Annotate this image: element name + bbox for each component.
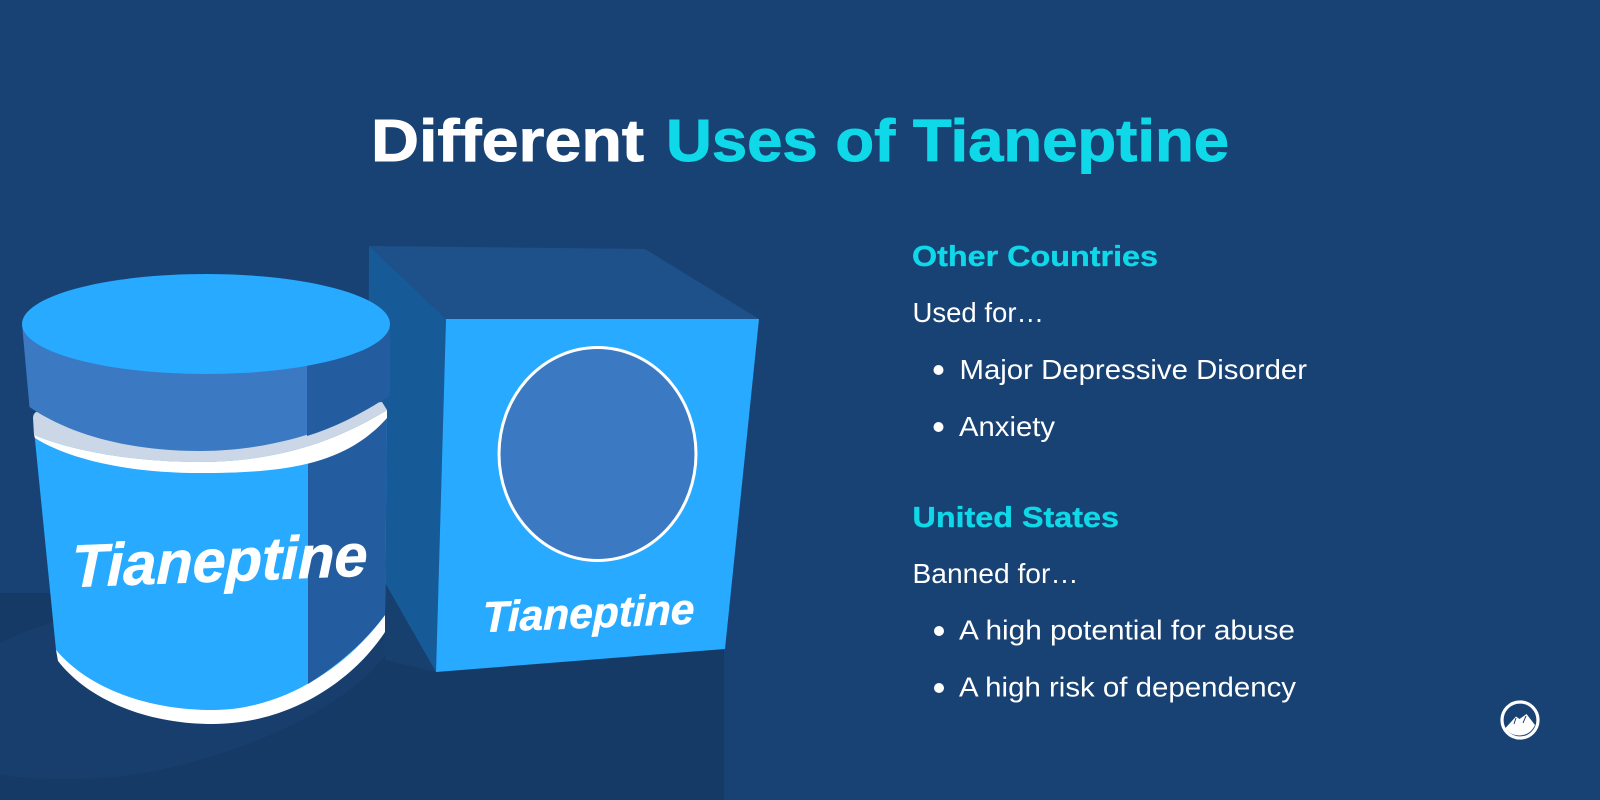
icon: mountain logo bbox=[1502, 702, 1538, 738]
heading: Other Countries bbox=[912, 241, 1158, 273]
intro: Used for… bbox=[912, 297, 1044, 328]
box ground shadow bbox=[385, 583, 436, 672]
box top face bbox=[369, 246, 759, 319]
box front face bbox=[436, 319, 759, 672]
box label text: Tianeptine bbox=[482, 585, 695, 642]
lid side shaded bbox=[307, 324, 390, 436]
box left face bbox=[368, 246, 446, 672]
box bbox=[368, 246, 759, 672]
bullet list bbox=[934, 614, 1296, 702]
bullet list: A high risk of dependency bbox=[959, 672, 1296, 702]
jar neck ring grey bbox=[33, 402, 387, 462]
text block: united states bbox=[912, 502, 1296, 702]
jar neck ring white bbox=[34, 410, 387, 473]
intro: Banned for… bbox=[912, 558, 1078, 589]
box label circle bbox=[499, 348, 696, 560]
text block: other countries bbox=[912, 241, 1307, 442]
bullet list bbox=[934, 354, 1307, 442]
bullet list: A high potential for abuse bbox=[959, 614, 1295, 646]
title: Uses of Tianeptine bbox=[666, 108, 1229, 174]
title bbox=[371, 108, 1229, 174]
jar bottom white rim bbox=[56, 615, 385, 724]
bullet list: Major Depressive Disorder bbox=[960, 354, 1307, 385]
title: Different bbox=[371, 108, 644, 174]
jar body shaded side bbox=[308, 410, 387, 684]
heading: United States bbox=[912, 502, 1119, 534]
lid side bbox=[22, 324, 390, 451]
jar body bbox=[34, 410, 387, 710]
bullet list: Anxiety bbox=[959, 411, 1055, 442]
lid top bbox=[22, 274, 390, 374]
jar label text: Tianeptine bbox=[71, 522, 368, 600]
floor shadow bbox=[0, 593, 724, 800]
jar bbox=[22, 274, 390, 724]
